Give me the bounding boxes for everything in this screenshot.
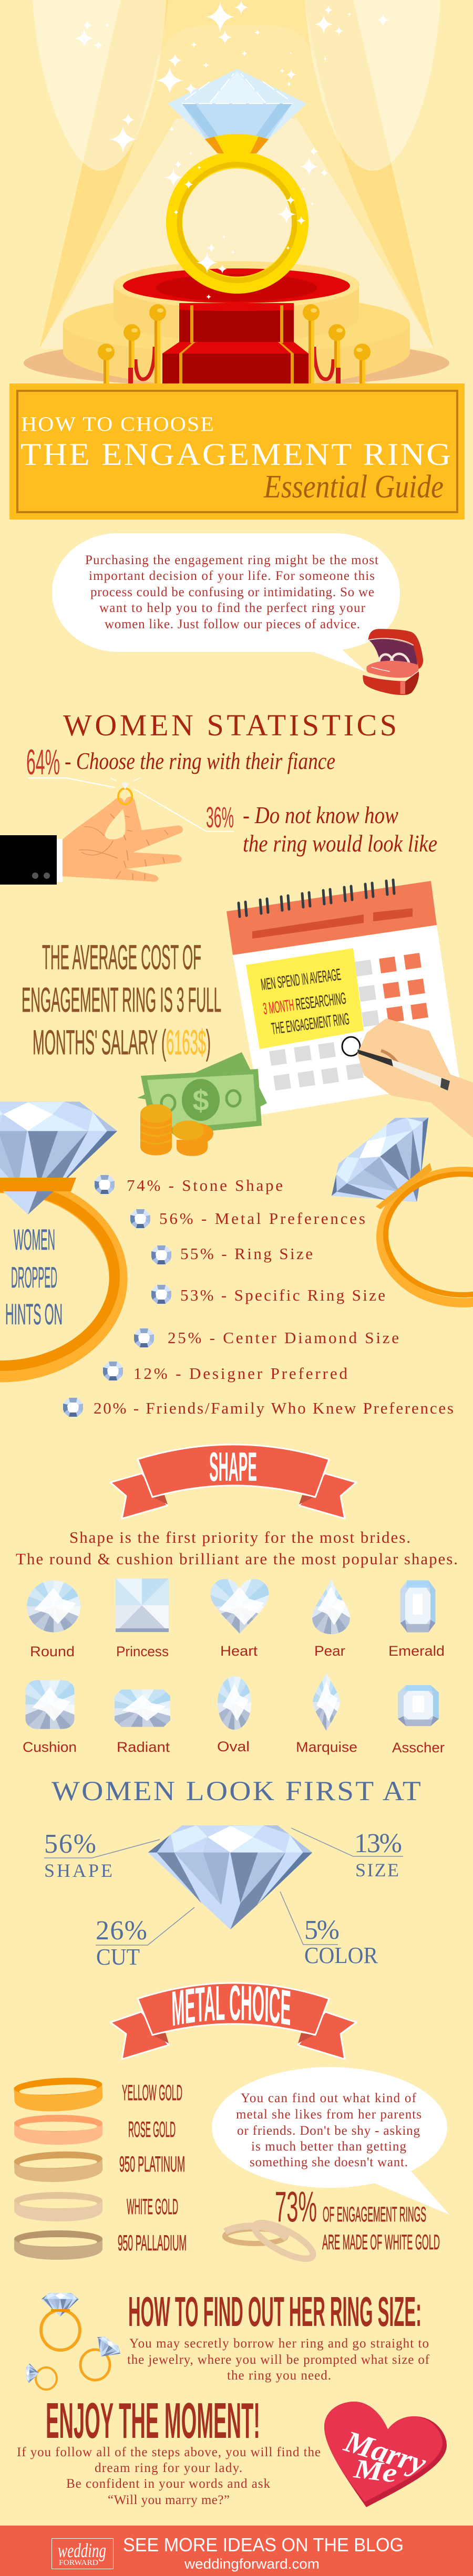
icon: money and coins (137, 1052, 267, 1156)
icon: interlocked white gold rings (225, 2216, 317, 2266)
gem labels: Heart (220, 1643, 258, 1659)
hand holding ring (0, 777, 183, 885)
icon: money and coins: $ (192, 1084, 209, 1117)
stat: 64 percent: - Choose the ring with their fiance (65, 747, 335, 774)
sticky note text: 3 MONTH RESEARCHING (262, 989, 347, 1018)
callout: color 5 percent: 5% (304, 1915, 340, 1945)
title banner (9, 383, 465, 520)
yellow sticky note (246, 948, 364, 1049)
gem labels: Round (30, 1644, 75, 1659)
gem labels (23, 1643, 445, 1756)
gem: marquise (313, 1673, 340, 1731)
average cost text: MONTHS' SALARY (6163$) (33, 1023, 211, 1062)
hand (63, 796, 183, 882)
gem labels: Princess (116, 1644, 169, 1659)
heading: women statistics: WOMEN STATISTICS (63, 708, 397, 742)
left diamond ring with hints heading: WOMEN (14, 1223, 55, 1256)
ribbon: metal choice (109, 1982, 357, 2060)
metal bands list (14, 2076, 187, 2260)
subtitle: essential guide: Essential Guide (263, 469, 444, 505)
shape intro text (16, 1528, 458, 1568)
footer (0, 2526, 473, 2576)
callout: size 13 percent (354, 1829, 402, 1881)
item: ring size: 55% - Ring Size (180, 1244, 313, 1263)
heart text: Me (352, 2454, 399, 2489)
enjoy the moment text: “Will you marry me?” (108, 2493, 230, 2507)
intro text: important decision of your life. For someone this (89, 569, 375, 583)
callout: color 5 percent (304, 1915, 378, 1968)
logo: FORWARD (59, 2559, 98, 2567)
intro speech bubble (52, 533, 400, 672)
footer call to action: SEE MORE IDEAS ON THE BLOG (123, 2534, 404, 2556)
gem labels: Pear (314, 1643, 345, 1659)
calendar binding (239, 880, 394, 917)
lower podium (63, 294, 410, 388)
shape intro text: Shape is the first priority for the most brides. (69, 1528, 410, 1546)
stat: 36 percent (206, 801, 437, 857)
text: YELLOW GOLD (122, 2080, 182, 2105)
callout: size 13 percent: SIZE (355, 1860, 399, 1881)
band: 950 platinum (14, 2150, 103, 2184)
ring size text: You may secretly borrow her ring and go straight to (129, 2336, 429, 2351)
stat: 36 percent: the ring would look like (243, 830, 437, 857)
ring size text: the ring you need. (227, 2369, 331, 2383)
bubble text (236, 2091, 421, 2169)
bubble text: or friends. Don't be shy - asking (237, 2124, 420, 2138)
text: THE AVERAGE COST OF (42, 938, 201, 977)
calendar day cells (269, 960, 379, 1090)
intro text: process could be confusing or intimidating. So we (90, 585, 374, 599)
intro text: women like. Just follow our pieces of advice. (105, 617, 360, 631)
bubble text: You can find out what kind of (241, 2091, 417, 2105)
text: 950 PLATINUM (119, 2152, 185, 2176)
calendar illustration (227, 880, 460, 1115)
stat: 64 percent (26, 742, 335, 782)
item: metal preferences: 56% - Metal Preferences (159, 1209, 365, 1228)
shape intro text: The round & cushion brilliant are the most popular shapes. (16, 1550, 458, 1568)
callout: cut 26 percent (96, 1916, 147, 1970)
bubble text: metal she likes from her parents (236, 2107, 421, 2122)
red carpet (162, 303, 309, 384)
callout: size 13 percent: 13% (354, 1829, 402, 1858)
band: yellow gold (14, 2076, 104, 2113)
ring small (26, 2363, 57, 2390)
intro text (85, 553, 378, 631)
stat: 64 percent: 64% (26, 742, 60, 782)
callout: shape 56 percent (44, 1829, 112, 1881)
item: designer preferred: 12% - Designer Preferred (133, 1364, 348, 1383)
diamond shapes grid (16, 1567, 445, 1756)
gem: heart (210, 1579, 269, 1634)
how to find size rings (26, 2293, 123, 2390)
text: ROSE GOLD (128, 2117, 176, 2142)
gem: oval (218, 1676, 251, 1730)
right diamond ring (318, 1102, 473, 1303)
hand writing on calendar (342, 1020, 473, 1136)
gem labels: Marquise (296, 1739, 357, 1755)
stage shadow (24, 339, 449, 387)
stat connector lines (28, 778, 234, 832)
item: center diamond size: 25% - Center Diamond Size (168, 1328, 399, 1347)
callout: color 5 percent: COLOR (304, 1943, 378, 1968)
ring size text: the jewelry, where you will be prompted what size of (127, 2353, 430, 2367)
logo (52, 2538, 114, 2569)
enjoy the moment text: Be confident in your words and ask (66, 2477, 270, 2491)
calendar illustration: MEN SPEND IN AVERAGE (260, 965, 342, 994)
hero illustration: spotlight stage with ring (24, 0, 449, 388)
calendar illustration: THE ENGAGEMENT RING (270, 1010, 351, 1038)
text: WHITE GOLD (127, 2194, 178, 2219)
bubble text: something she doesn't want. (250, 2155, 408, 2169)
gem labels: Cushion (23, 1739, 77, 1755)
item: specific ring size: 53% - Specific Ring Size (180, 1286, 385, 1304)
diamond ring in fingers (110, 777, 141, 804)
callout lines (44, 1828, 403, 1945)
item: friends family: 20% - Friends/Family Who Knew Preferences (94, 1399, 454, 1417)
intro text: want to help you to find the perfect ring your (99, 601, 366, 615)
heading: women look first at: WOMEN LOOK FIRST AT (52, 1776, 423, 1806)
sparkles (75, 0, 389, 299)
text: 950 PALLADIUM (118, 2230, 187, 2255)
icon: open ring box (363, 629, 423, 695)
gem: round (27, 1580, 80, 1633)
enjoy the moment text: dream ring for your lady. (95, 2461, 242, 2475)
ring medium (80, 2333, 123, 2380)
gem labels: Emerald (388, 1643, 445, 1659)
average cost text (22, 938, 221, 1062)
gem labels: Oval (217, 1739, 250, 1754)
callout: cut 26 percent: 26% (96, 1916, 147, 1946)
gem: radiant (115, 1689, 170, 1727)
left diamond ring with hints heading: DROPPED (11, 1261, 57, 1294)
gold ring band (166, 151, 309, 294)
callout: cut 26 percent: CUT (96, 1944, 140, 1970)
left diamond ring with hints heading (0, 1102, 118, 1373)
brass posts and ropes (98, 304, 371, 384)
title: how to choose: HOW TO CHOOSE (21, 413, 215, 435)
heart: marry me (324, 2402, 447, 2507)
diamond (0, 1102, 117, 1214)
enjoy the moment text (17, 2445, 321, 2507)
left diamond ring with hints heading: HINTS ON (5, 1297, 63, 1331)
ring size text (127, 2336, 430, 2383)
gem: asscher (398, 1685, 439, 1726)
metal speech bubble (212, 2067, 449, 2215)
intro text: Purchasing the engagement ring might be the most (85, 553, 378, 567)
hints list (63, 1175, 454, 1417)
gem: cushion (25, 1680, 75, 1729)
band: 950 palladium (14, 2230, 102, 2260)
band: white gold (14, 2192, 102, 2221)
bubble text: is much better than getting (251, 2139, 407, 2154)
ribbon: shape (110, 1443, 356, 1519)
ribbon text: METAL CHOICE (172, 1985, 290, 2026)
spotlight beams (33, 0, 440, 348)
item: stone shape: 74% - Stone Shape (127, 1176, 283, 1194)
ring large (41, 2293, 80, 2350)
coin stacks (140, 1114, 172, 1156)
gem: princess (116, 1578, 169, 1632)
ring band (0, 1184, 118, 1373)
women dropped hints on (5, 1223, 63, 1331)
gem labels: Radiant (117, 1739, 170, 1755)
ribbon: shape: SHAPE (209, 1443, 257, 1490)
sticky note text (260, 965, 351, 1038)
upper podium (114, 261, 359, 341)
gem labels: Asscher (392, 1740, 445, 1756)
callout: shape 56 percent: 56% (44, 1829, 96, 1859)
heart text: Marry (340, 2424, 430, 2481)
gem: pear (312, 1578, 350, 1634)
title: the engagement ring: THE ENGAGEMENT RING (20, 437, 453, 472)
stat: 73 percent white gold (275, 2183, 440, 2254)
stat: 73 percent white gold: 73% (275, 2183, 317, 2231)
stat: 36 percent: 36% (206, 801, 234, 834)
ring setting (0, 1178, 76, 1191)
diamond on ring (168, 69, 306, 153)
logo: wedding (58, 2540, 106, 2562)
callout: shape 56 percent: SHAPE (44, 1860, 112, 1881)
stat: 36 percent: - Do not know how (243, 802, 398, 828)
footer url: weddingforward.com (184, 2556, 320, 2572)
suit sleeve (0, 835, 57, 885)
gem: emerald (400, 1580, 435, 1633)
large diamond chart (44, 1825, 403, 1970)
enjoy the moment text: If you follow all of the steps above, you will find the (17, 2445, 321, 2459)
band: rose gold (14, 2115, 102, 2145)
